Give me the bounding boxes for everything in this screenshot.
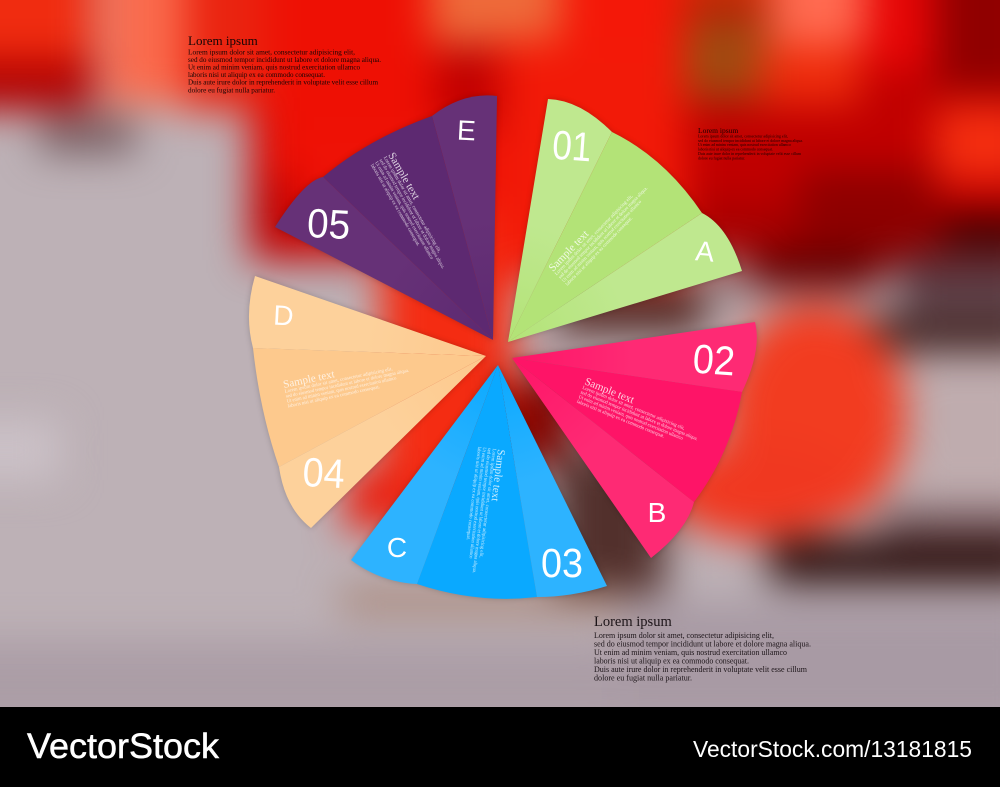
text block: top left: laboris nisi ut aliquip ex ea commodo consequat. [188, 71, 325, 79]
panel: blue segment 03/C [351, 365, 607, 599]
text block: bottom right: Lorem ipsum dolor sit amet, consectetur adipisicing elit, [594, 631, 774, 640]
sample text: green: sed do eiusmod tempor incididunt ut labore et dolore magna aliqua. [558, 186, 649, 280]
sample text: orange [282, 353, 412, 410]
sample text: blue [461, 446, 507, 575]
sample text: pink: Sample text [583, 376, 636, 406]
footer url: VectorStock.com/13181815 [693, 736, 972, 762]
sample text: purple: laboris nisi ut aliquip ex ea commodo consequat. [369, 164, 420, 247]
sample text: pink: Lorem ipsum dolor sit amet, consectetur adipisicing elit, [581, 386, 685, 432]
text block: top right: dolore eu fugiat nulla pariatur. [698, 156, 745, 160]
text block: top right: Lorem ipsum dolor sit amet, consectetur adipisicing elit, [698, 134, 788, 140]
text block: top left: sed do eiusmod tempor incididunt ut labore et dolore magna aliqua. [188, 56, 381, 64]
sample text: blue: sed do eiusmod tempor incididunt ut labore et dolore magna aliqua. [471, 448, 491, 573]
text block: bottom right: dolore eu fugiat nulla pariatur. [594, 674, 692, 682]
band middle [508, 132, 702, 342]
sample text: pink: sed do eiusmod tempor incididunt ut labore et dolore magna aliqua. [580, 390, 698, 442]
sample text: blue: Lorem ipsum dolor sit amet, consectetur adipisicing elit, [478, 448, 496, 558]
text block: top right: Ut enim ad minim veniam, quis nostrud exercitation ullamco [698, 143, 791, 148]
sample text: purple: Lorem ipsum dolor sit amet, consectetur adipisicing elit, [382, 156, 441, 254]
footer bar [0, 707, 1000, 787]
footer logo: VectorStock [27, 727, 220, 766]
number 05: 05 [306, 200, 351, 248]
number 03: 03 [541, 540, 583, 586]
band C [351, 365, 498, 584]
letter A: A [694, 235, 716, 268]
sample text: pink: Ut enim ad minim veniam, quis nostrud exercitation ullamco [578, 395, 684, 442]
sample text: blue: Sample text [489, 449, 507, 502]
letter D: D [273, 300, 294, 332]
band D [249, 276, 486, 356]
band 01 [508, 99, 612, 342]
text block: top left: Lorem ipsum [188, 33, 258, 48]
sample text: orange: Lorem ipsum dolor sit amet, consectetur adipisicing elit, [284, 367, 393, 395]
band middle [323, 116, 493, 340]
text block: top left [188, 33, 381, 94]
text block: bottom right: Duis aute irure dolor in reprehenderit in voluptate velit esse cillum [594, 665, 808, 674]
band middle [417, 365, 537, 599]
letter E: E [456, 115, 477, 146]
sample text: purple: Ut enim ad minim veniam, quis nostrud exercitation ullamco [373, 161, 434, 261]
sample text: purple: sed do eiusmod tempor incididunt ut labore et dolore magna aliqua. [378, 158, 445, 270]
band middle [253, 348, 486, 467]
band A [508, 213, 742, 342]
text block: bottom right: laboris nisi ut aliquip ex ea commodo consequat. [594, 656, 749, 666]
band B [512, 358, 694, 558]
band 03 [498, 365, 607, 597]
sample text: green: Ut enim ad minim veniam, quis nostrud exercitation ullamco [562, 199, 643, 284]
sample text: blue: laboris nisi ut aliquip ex ea commodo consequat. [465, 446, 481, 540]
sample text: blue: Ut enim ad minim veniam, quis nostrud exercitation ullamco [467, 447, 486, 559]
text block: top right: Lorem ipsum [698, 126, 738, 135]
band E [432, 95, 497, 340]
band 02 [512, 322, 757, 392]
text block: top right [698, 126, 803, 160]
text block: top left: Lorem ipsum dolor sit amet, consectetur adipisicing elit, [188, 48, 355, 56]
text block: top right: Duis aute irure dolor in reprehenderit in voluptate velit esse cillum [698, 152, 801, 156]
band middle [512, 358, 742, 502]
text block: top right: laboris nisi ut aliquip ex ea commodo consequat. [698, 148, 773, 152]
panel: purple segment 05/E [275, 95, 497, 340]
text block: bottom right: Lorem ipsum [594, 614, 672, 630]
band 04 [279, 356, 486, 528]
sample text: green: Lorem ipsum dolor sit amet, consectetur adipisicing elit, [554, 194, 634, 277]
text block: bottom right [594, 614, 811, 682]
panel: orange segment 04/D [249, 276, 486, 528]
panel: pink segment 02/B [512, 322, 757, 558]
sample text: pink [576, 376, 704, 452]
text block: bottom right: sed do eiusmod tempor incididunt ut labore et dolore magna aliqua. [594, 640, 811, 648]
text block: top left: Duis aute irure dolor in reprehenderit in voluptate velit esse cillum [188, 78, 378, 86]
number 02: 02 [691, 336, 737, 384]
text block: top right: sed do eiusmod tempor incididunt ut labore et dolore magna aliqua. [698, 139, 803, 143]
letter B: B [648, 497, 666, 528]
text block: bottom right: Ut enim ad minim veniam, quis nostrud exercitation ullamco [594, 648, 787, 657]
sample text: green: Sample text [547, 228, 591, 274]
number 04: 04 [302, 449, 346, 497]
text block: top left: Ut enim ad minim veniam, quis nostrud exercitation ullamco [188, 64, 360, 72]
sample text: purple: Sample text [385, 150, 422, 202]
sample text: pink: laboris nisi ut aliquip ex ea commodo consequat. [576, 400, 665, 440]
sample text: orange: Sample text [282, 368, 336, 391]
sample text: orange: laboris nisi ut aliquip ex ea commodo consequat. [288, 385, 381, 410]
sample text: orange: sed do eiusmod tempor incididunt ut labore et dolore magna aliqua. [285, 369, 410, 400]
text block: top left: dolore eu fugiat nulla pariatur. [188, 86, 275, 94]
letter C: C [387, 532, 407, 563]
number 01: 01 [551, 122, 593, 170]
band 05 [275, 177, 493, 340]
sample text: orange: Ut enim ad minim veniam, quis nostrud exercitation ullamco [286, 376, 398, 405]
sample text: green: laboris nisi ut aliquip ex ea commodo consequat. [565, 216, 634, 287]
panel: green segment 01/A [508, 99, 742, 342]
